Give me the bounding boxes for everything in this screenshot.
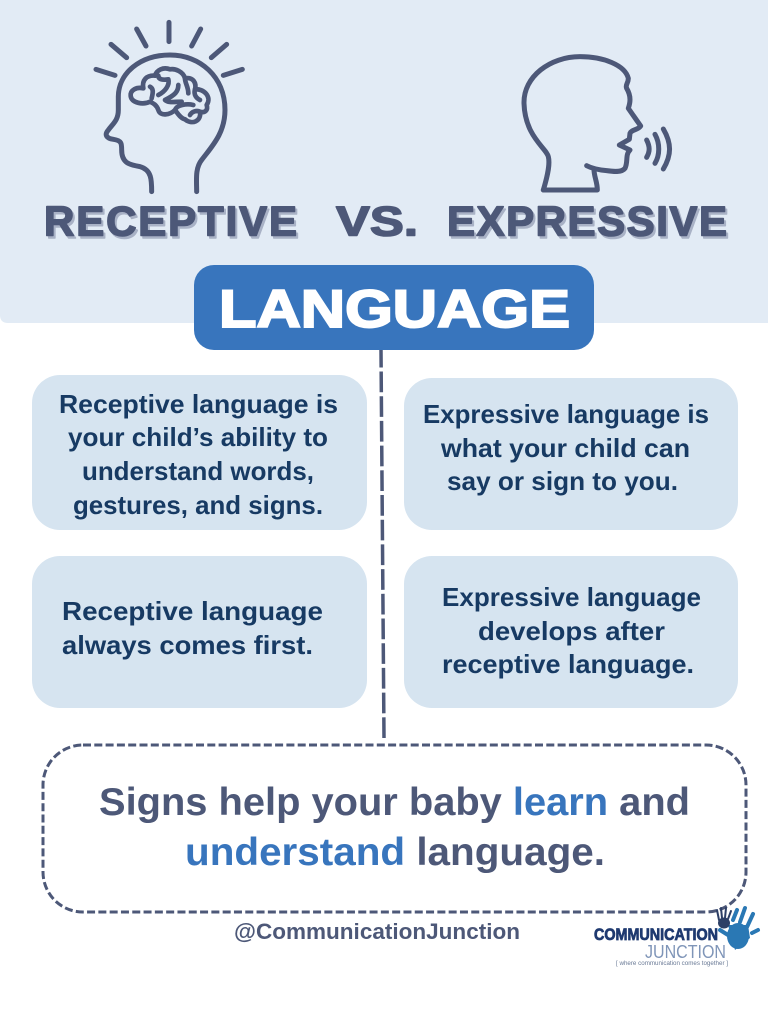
callout: signs help: [43, 745, 746, 912]
panel: expressive definition: Expressive language is: [423, 399, 709, 429]
panel: receptive order: [32, 556, 367, 708]
title badge: language: [194, 265, 594, 350]
panel: receptive order: always comes first.: [62, 630, 313, 660]
title badge: language: LANGUAGE: [219, 280, 570, 339]
icon: brain: [131, 68, 208, 122]
heading: vs: VS.: [336, 198, 418, 244]
panel: receptive definition: Receptive language is: [59, 389, 338, 419]
callout: signs help: understand language.: [185, 831, 605, 874]
logo: communication junction: [ where communication comes together ]: [616, 960, 728, 967]
heading: receptive: RECEPTIVE: [46, 200, 299, 247]
logo: communication junction: JUNCTION: [645, 942, 726, 962]
heading: receptive: RECEPTIVE: [44, 198, 297, 244]
icon: small hand: [717, 908, 731, 928]
icon: head with brain: [96, 22, 242, 192]
social handle: @CommunicationJunction: [234, 919, 520, 944]
panel: expressive definition: say or sign to you.: [447, 466, 678, 496]
panel: receptive order: Receptive language: [62, 596, 323, 626]
logo: communication junction: [594, 908, 758, 967]
icon: blue hand: [720, 908, 758, 950]
panel: expressive definition: [404, 378, 738, 530]
header panel: [0, 0, 768, 323]
center divider: [381, 350, 384, 738]
heading: expressive: EXPRESSIVE: [449, 200, 729, 247]
panel: expressive order: develops after: [478, 616, 665, 646]
panel: expressive order: receptive language.: [442, 649, 694, 679]
panel: receptive definition: your child’s ability to: [68, 422, 328, 452]
icon: speaking head: [524, 57, 670, 190]
panel: receptive definition: [32, 375, 367, 530]
panel: receptive definition: understand words,: [82, 456, 314, 486]
panel: expressive order: Expressive language: [442, 582, 701, 612]
callout: signs help: Signs help your baby learn and: [99, 781, 690, 824]
panel: expressive order: [404, 556, 738, 708]
logo: communication junction: COMMUNICATION: [594, 925, 718, 944]
heading: expressive: EXPRESSIVE: [447, 198, 727, 244]
panel: receptive definition: gestures, and signs.: [73, 490, 323, 520]
panel: expressive definition: what your child can: [440, 433, 690, 463]
